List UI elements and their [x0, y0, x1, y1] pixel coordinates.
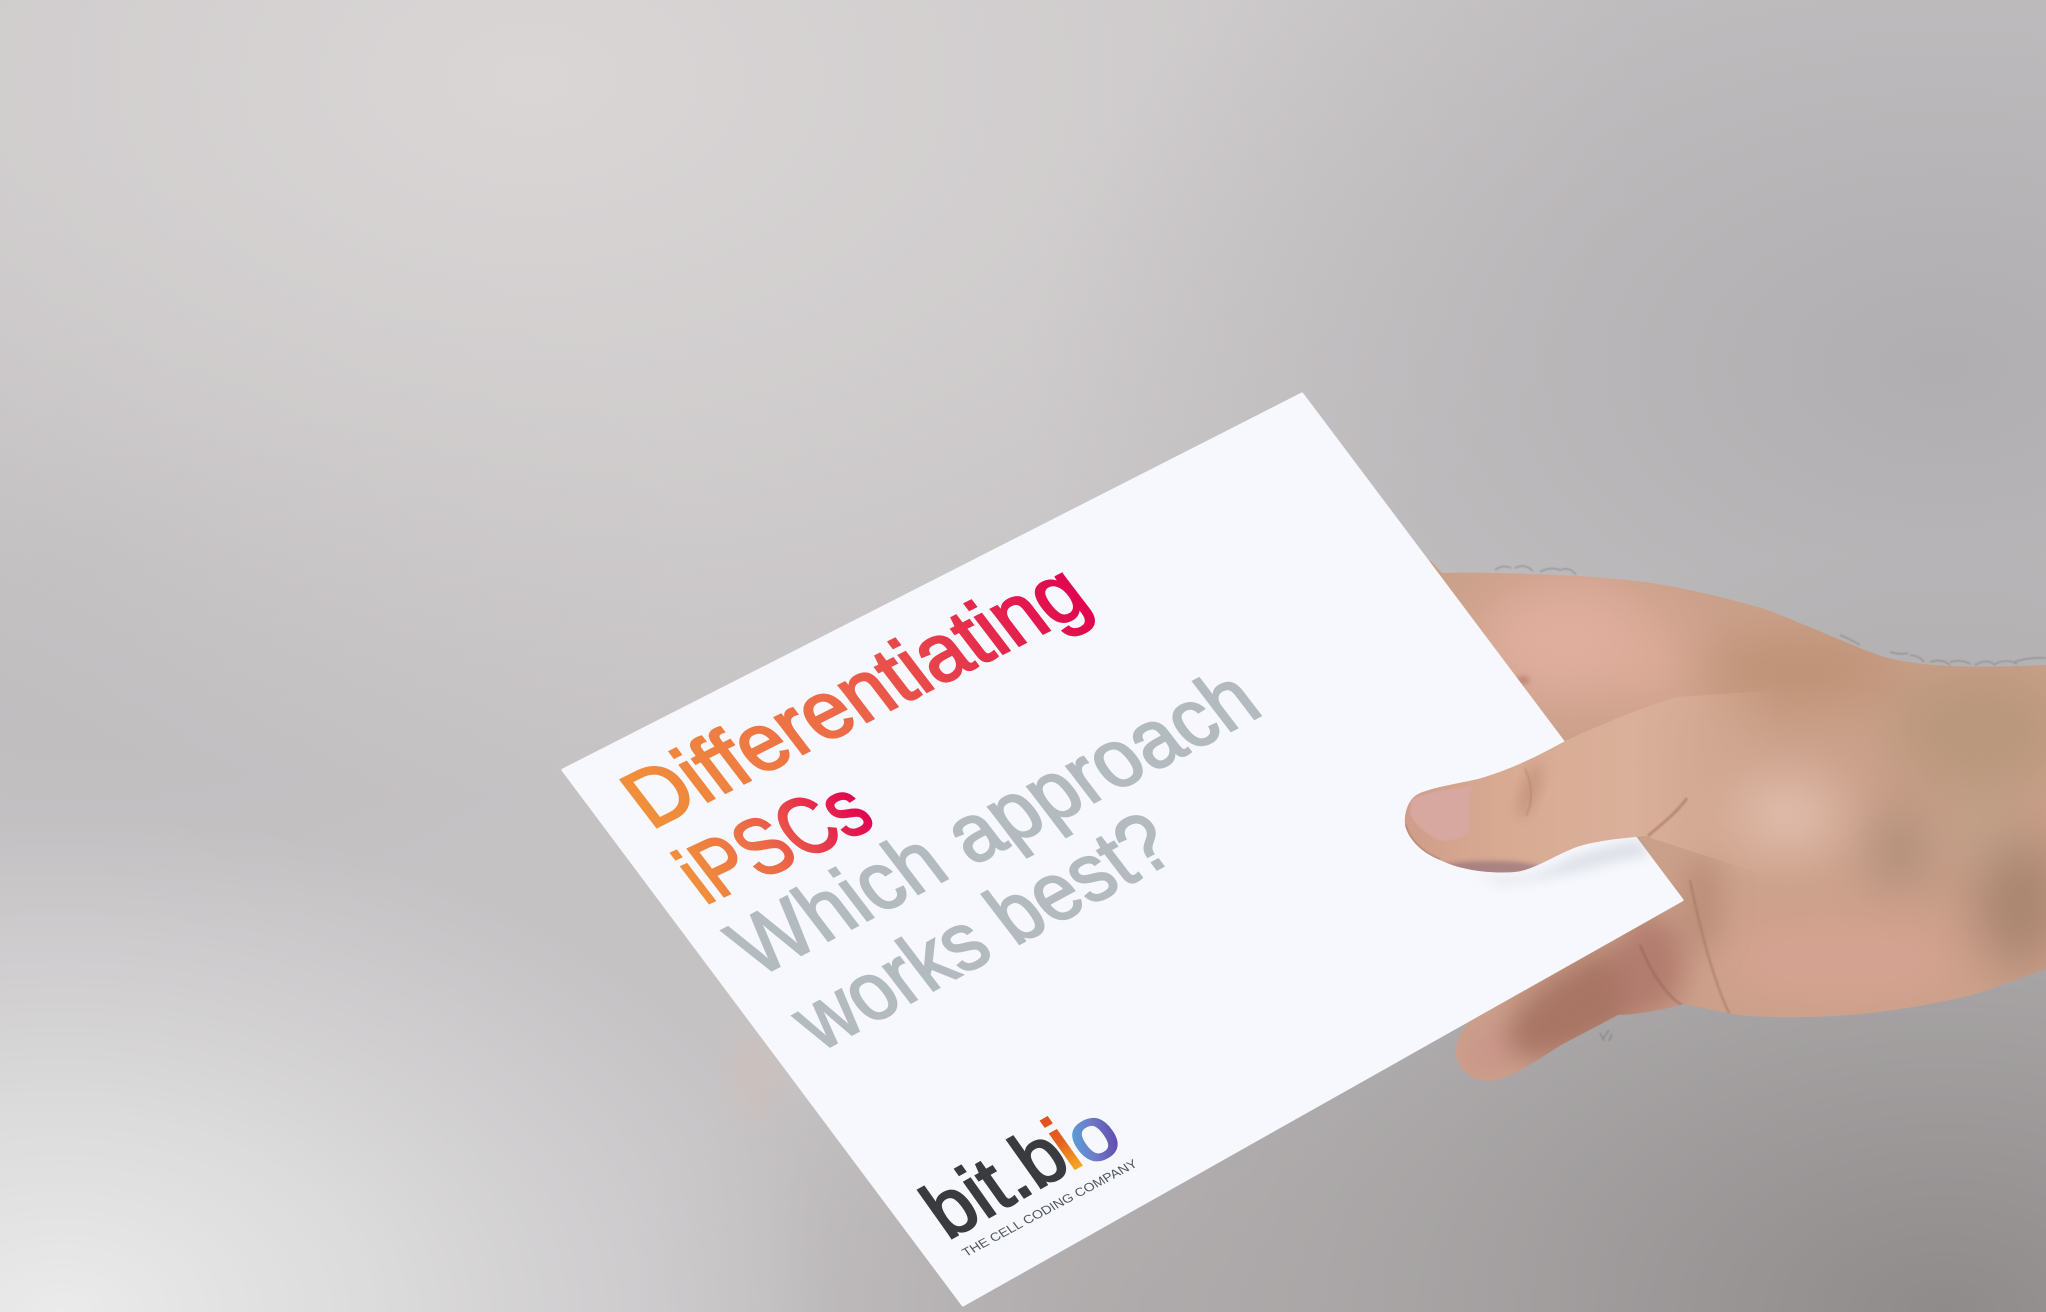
hand: palm, wrist and fingers behind the card	[1430, 560, 2046, 1082]
logo: bit.bio: o	[1047, 1089, 1136, 1181]
thumb web crease	[1648, 798, 1687, 836]
thumbnail	[1410, 786, 1472, 841]
hair on the back of the hand	[1495, 566, 2046, 1041]
logo: bit.bio	[906, 1083, 1136, 1258]
subtitle: Which approach works best?: Which approach	[710, 651, 1277, 993]
subtitle: Which approach works best?: works best?	[772, 796, 1192, 1068]
card	[563, 394, 1682, 1305]
tagline: The Cell Coding Company: THE CELL CODING COMPANY	[959, 1157, 1141, 1259]
shadow of thumb on card	[1460, 840, 1650, 884]
title: Differentiating iPSCs: iPSCs	[657, 763, 890, 920]
logo: bit.bio: bit.b	[906, 1111, 1084, 1255]
thumb over the card	[1404, 694, 1731, 872]
thumb knuckle creases	[1525, 768, 1531, 816]
logo: bit.bio: i	[1029, 1104, 1096, 1186]
title: Differentiating iPSCs: Differentiating	[603, 545, 1106, 845]
faint orange reflection below the card edge	[738, 1030, 774, 1120]
